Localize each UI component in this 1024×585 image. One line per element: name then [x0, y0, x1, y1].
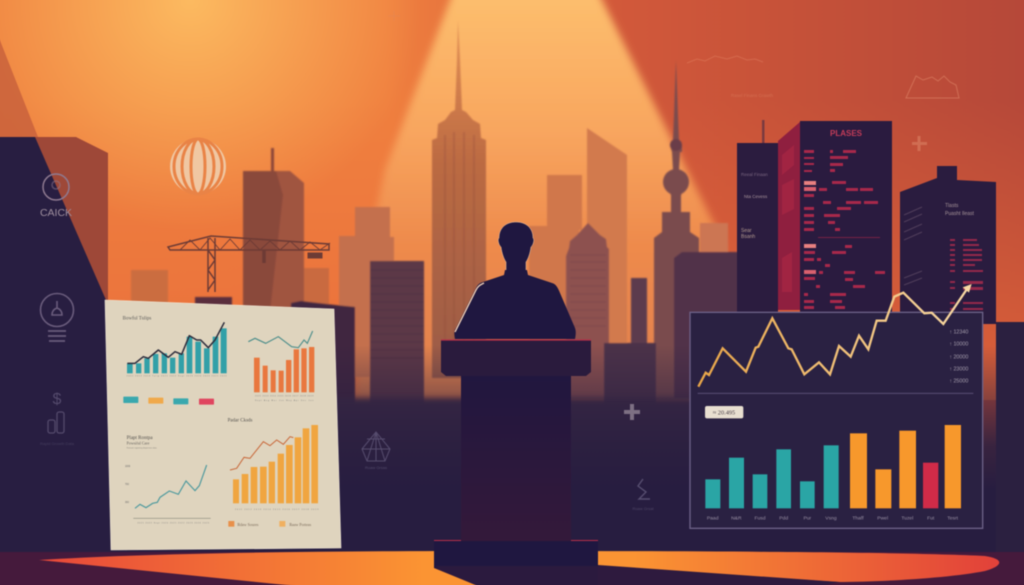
balloon icon	[170, 138, 226, 194]
chart: amber bars with line: Raaw Porteas	[289, 522, 312, 527]
building: low base	[195, 297, 232, 307]
chart: teal line: 1000	[125, 466, 131, 468]
label: CAICK: CAICK	[40, 207, 72, 219]
building: mid block	[529, 175, 582, 350]
podium	[434, 340, 598, 541]
speaker silhouette	[454, 222, 576, 339]
chart: teal bars with line: Bowful Tulips	[123, 317, 151, 322]
bar labels: Tesrt	[947, 516, 959, 522]
faint arrow caption: Roaw Grsat	[632, 506, 654, 511]
podium column	[461, 375, 571, 541]
building: TV tower	[654, 60, 699, 400]
faint plus	[624, 404, 640, 420]
plinth shadow	[434, 565, 840, 585]
value chip: ≈ 20.495	[713, 409, 735, 416]
panel: dark dashboard	[690, 284, 983, 528]
torso	[454, 270, 576, 339]
faint wire-globe icon	[362, 432, 390, 461]
building: central dark tower	[243, 148, 304, 312]
chart: amber bars with line: Padar Cksds	[228, 419, 253, 424]
bar labels: Pwel	[877, 516, 888, 522]
icon: bars	[48, 412, 64, 433]
building: right tower with table: Puasht Ileast	[945, 211, 975, 217]
label: PLASES: PLASES	[830, 129, 863, 138]
chart: amber bars with line: 2011 2012 2013 2014 2015 2016 2017 2018 2019	[235, 509, 319, 511]
stage floor	[0, 551, 1024, 585]
axis labels: ↑ 23000	[949, 367, 968, 373]
chart: teal line: Powsiful Care	[127, 441, 150, 446]
chart: amber bars with line	[228, 419, 319, 527]
left translucent wedge and block	[0, 15, 108, 305]
chart: orange bars with line	[248, 331, 314, 402]
chart: teal bars with line: 2001 2012 2013 Tulip 2021 2022 Sept 2023 2024 2022 2021 2022	[127, 374, 227, 377]
lower city silhouettes	[330, 398, 700, 495]
spotlight beam	[355, 0, 735, 400]
building: pyramid-top tower	[566, 223, 609, 399]
head	[498, 222, 534, 276]
red data lines	[804, 150, 885, 309]
distant skyline	[131, 20, 750, 437]
podium base step	[434, 566, 598, 585]
bar labels	[707, 516, 959, 522]
building: striped tower left	[370, 261, 424, 431]
faint wave line	[687, 56, 763, 63]
chart: teal line	[125, 436, 211, 525]
dusk fade across lower city	[0, 345, 1024, 490]
bar labels: Pur	[803, 516, 812, 522]
bar labels: Pdd	[779, 516, 788, 522]
building: small block beside tower	[700, 223, 728, 263]
foreground dark band	[0, 488, 1024, 552]
right far dark block	[996, 322, 1024, 552]
chart: orange bars with line: 2021 2013 2014 2015 2016 2017 2018 2019	[255, 395, 314, 397]
building: dark block behind speaker	[631, 278, 647, 400]
chart: teal line: 700	[125, 484, 130, 486]
bar labels: Fusd	[754, 516, 766, 522]
faint globe caption: Roaw Grsas	[365, 465, 387, 470]
chart: teal line: Rateant regioning dispension data	[127, 447, 158, 450]
faint plus icon	[912, 136, 927, 151]
building: large tower with red data	[778, 121, 892, 313]
charts on paper, coordinates in 3x space	[123, 317, 319, 527]
bar labels: Vsng	[825, 516, 837, 522]
building: left pale block	[339, 207, 394, 377]
bar chart	[705, 425, 961, 508]
divider	[698, 392, 973, 395]
left dark building with icons	[0, 137, 112, 552]
podium base	[434, 541, 598, 568]
bar labels: Tuzel	[901, 516, 913, 522]
axis labels: ↑ 25000	[949, 379, 968, 385]
chart: teal line: 2021 2022 Sept 2020 2021 2022 2023 2024 2025	[137, 522, 210, 525]
building: dark tower with text	[737, 120, 778, 313]
chart: teal bars with line	[123, 317, 227, 377]
building: wide block behind panel	[674, 252, 750, 398]
chart: rising line with arrow	[698, 284, 972, 387]
building: tall slanted tower	[587, 128, 627, 345]
icon: magnifier circle	[43, 174, 69, 200]
axis labels	[949, 329, 968, 385]
bar labels: Thaff	[852, 516, 864, 522]
icon: dollar sign: $	[53, 391, 62, 408]
building: Empire-style tower	[432, 20, 486, 378]
building: dark tower with text: Bsanh	[741, 234, 755, 240]
axis labels: ↑ 10000	[949, 342, 968, 348]
building: small block by crane	[304, 268, 329, 308]
faint arrow icon	[638, 479, 650, 499]
small caption: Rapid Growth Data	[40, 441, 75, 446]
building: block lower centre	[604, 343, 656, 423]
panel: paper report	[105, 300, 341, 550]
building: dark tower with text: Sear	[741, 228, 752, 234]
bar labels: Fut	[927, 516, 935, 522]
faint mountain chart icon	[906, 76, 959, 98]
axis labels: ↑ 12340	[949, 329, 968, 335]
table rows	[950, 239, 983, 310]
legend chips	[123, 397, 214, 405]
stage light pool	[39, 551, 999, 585]
faint caption: Rasel Finans Grawth	[731, 93, 774, 98]
chart: amber bars with line: Rdaw Soures	[237, 522, 259, 527]
building: dark tower with text: Reeal Finaan	[741, 172, 768, 177]
chart: teal line: 300	[125, 502, 130, 504]
faint top plus	[388, 11, 400, 21]
bar labels: N&R	[731, 516, 742, 522]
value chip	[705, 406, 743, 418]
bar labels: Paad	[707, 516, 719, 522]
podium top	[441, 340, 591, 376]
axis labels: ↑ 20000	[949, 354, 968, 360]
construction crane	[168, 236, 330, 292]
label block: Tlasts	[945, 203, 959, 209]
chart: teal line: Plapt Rontpa	[127, 436, 153, 441]
chart: orange bars with line: Sept Aug Mar Jun May Apr Dec Jan	[255, 399, 313, 402]
building: right tower with table	[900, 166, 996, 324]
building: dark tower with text: Nta Cevess	[744, 194, 768, 199]
building: far small block	[131, 270, 168, 305]
icon: light bulb	[40, 294, 74, 341]
building: dark block right of paper	[291, 301, 355, 437]
